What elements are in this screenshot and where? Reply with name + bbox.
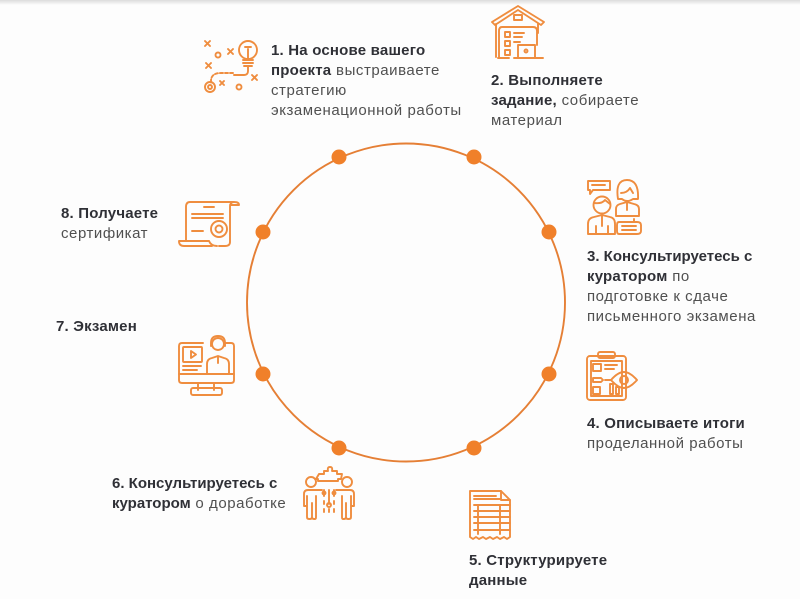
step 1 text: проекта выстраиваете: [271, 62, 440, 79]
icon: clipboard with eye: [587, 352, 637, 400]
step 2 text: 2. Выполняете: [491, 72, 603, 89]
step 8 text: [61, 205, 158, 242]
icon: team with puzzle piece: [304, 467, 354, 519]
step 5 text: [469, 552, 607, 589]
icon: certificate on laptop: [179, 202, 239, 246]
icon: video lesson monitor: [179, 336, 234, 395]
step 4 text: проделанной работы: [587, 435, 743, 452]
step 3 text: подготовке к сдаче: [587, 288, 728, 305]
icon: lightbulb strategy map: [205, 41, 257, 92]
icon: consultation people: [588, 180, 641, 234]
step 3 text: письменного экзамена: [587, 308, 756, 325]
step 1 text: [271, 42, 462, 119]
step 7 text: 7. Экзамен: [56, 318, 137, 335]
step 6 text: [112, 475, 286, 512]
step 6 text: куратором о доработке: [112, 495, 286, 512]
process circle: [247, 144, 565, 462]
step 2 text: материал: [491, 112, 563, 129]
step 4 text: [587, 415, 745, 452]
step 8 text: сертификат: [61, 225, 148, 242]
step 6 text: 6. Консультируетесь с: [112, 475, 277, 492]
step 1 text: экзаменационной работы: [271, 102, 462, 119]
step 1 text: 1. На основе вашего: [271, 42, 425, 59]
step 2 text: задание, собираете: [491, 92, 639, 109]
step 8 text: 8. Получаете: [61, 205, 158, 222]
step 3 text: куратором по: [587, 268, 690, 285]
step 2 text: [491, 72, 639, 129]
step 1 text: стратегию: [271, 82, 347, 99]
step 3 text: [587, 248, 756, 325]
icon: document table: [470, 491, 510, 539]
step 4 text: 4. Описываете итоги: [587, 415, 745, 432]
icon: house with checklist: [492, 6, 544, 58]
step 3 text: 3. Консультируетесь с: [587, 248, 752, 265]
step 5 text: данные: [469, 572, 527, 589]
step 5 text: 5. Структурируете: [469, 552, 607, 569]
